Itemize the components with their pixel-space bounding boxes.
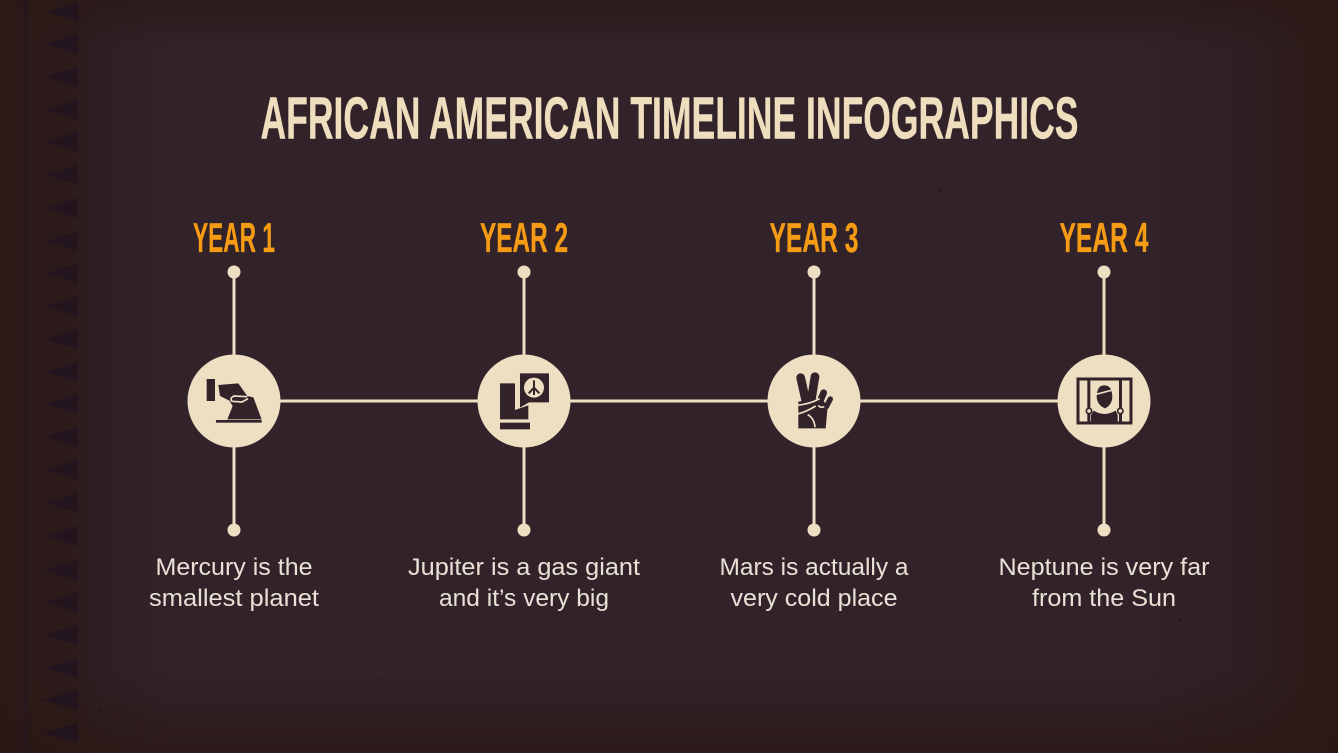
year 2 description: and it’s very big <box>439 585 609 612</box>
milestone: year 4 <box>998 214 1210 612</box>
year 1 bottom dot <box>228 524 240 536</box>
year 1 description: Mercury is the <box>156 554 312 581</box>
milestone: year 1 <box>149 214 319 612</box>
year 1 stem <box>232 272 236 530</box>
year 3 label: YEAR 3 <box>770 214 858 261</box>
year 1 label: YEAR 1 <box>193 214 275 261</box>
year 3 top dot <box>808 266 820 278</box>
year 2 icon: raised hand with peace speech bubble <box>478 354 570 448</box>
year 2 label: YEAR 2 <box>480 214 568 261</box>
year 4 bottom dot <box>1098 524 1110 536</box>
year 4 stem <box>1102 272 1106 530</box>
year 4 label: YEAR 4 <box>1060 214 1149 261</box>
year 4 icon: person behind bars <box>1058 354 1150 448</box>
year 2 description: Jupiter is a gas giant <box>408 554 640 581</box>
year 2 bottom dot <box>518 524 530 536</box>
year 2 stem <box>522 272 526 530</box>
year 3 bottom dot <box>808 524 820 536</box>
year 3 description: very cold place <box>730 585 898 612</box>
year 2 top dot <box>518 266 530 278</box>
horizontal timeline connector <box>234 400 1104 402</box>
year 1 icon: hand casting ballot <box>188 354 280 448</box>
milestone: year 2 <box>408 214 640 612</box>
milestone: year 3 <box>720 214 909 612</box>
year 4 top dot <box>1098 266 1110 278</box>
year 4 description: Neptune is very far <box>998 554 1210 581</box>
year 3 description: Mars is actually a <box>720 554 909 581</box>
year 1 description: smallest planet <box>149 585 319 612</box>
year 3 stem <box>812 272 816 530</box>
year 1 top dot <box>228 266 240 278</box>
year 4 description: from the Sun <box>1032 585 1176 612</box>
year 3 icon: victory hand <box>768 354 860 448</box>
